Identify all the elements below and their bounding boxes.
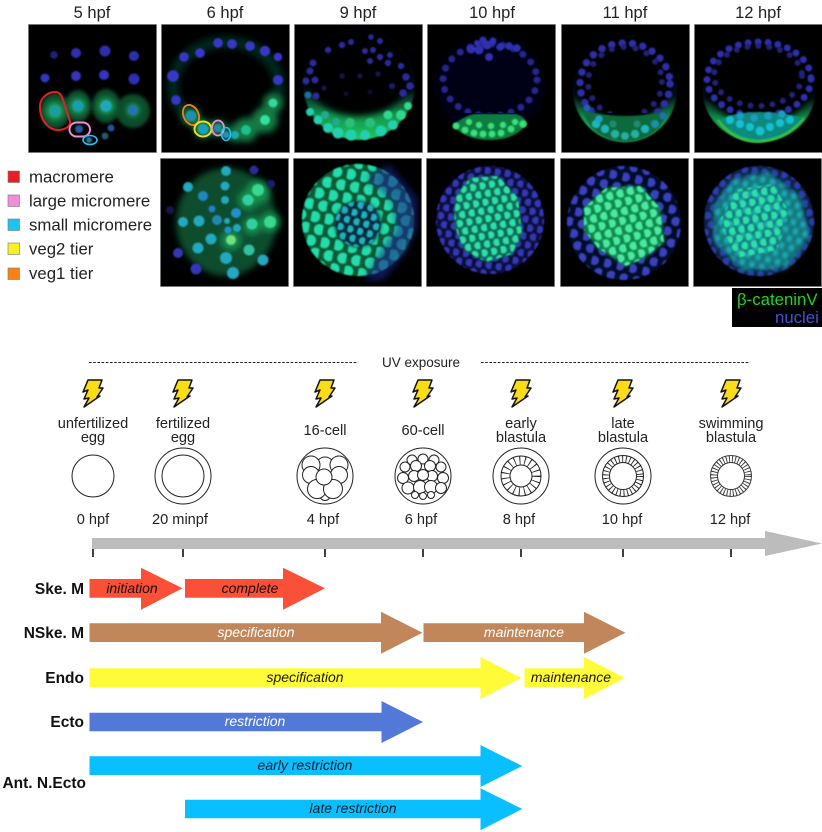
stage: late blastula: 10 hpf: [602, 512, 643, 528]
stage: 60-cell: 60-cell: [402, 423, 444, 439]
stain key: beta-cateninV and nuclei: nuclei: [775, 308, 819, 327]
stage: early blastula: [493, 416, 549, 528]
micrograph: 10 hpf lateral view: [427, 24, 556, 153]
arrow: Ant. N.Ecto late restriction: [185, 788, 522, 830]
legend item: veg2 tier: veg2 tier: [29, 240, 94, 258]
outline: small micromere: [222, 128, 230, 140]
micrograph: 5 hpf lateral view: [28, 24, 157, 153]
stage: unfertilized egg: [58, 416, 128, 528]
arrow: NSke. M maintenance: [424, 612, 626, 654]
micrograph: 11 hpf vegetal view: [560, 158, 689, 287]
arrow: Endo maintenance: [524, 657, 625, 699]
micrograph: 12 hpf vegetal view: [693, 158, 822, 287]
stage: swimming blastula: 12 hpf: [710, 512, 751, 528]
arrow: Ant. N.Ecto late restriction: late restriction: [309, 800, 397, 816]
outline: large micromere: [70, 122, 90, 136]
row label: Ecto: Ecto: [50, 714, 84, 731]
arrow: Ske. M initiation: initiation: [106, 580, 158, 596]
micrograph: 6 hpf vegetal view: [160, 158, 289, 287]
micrograph: 10 hpf vegetal view: [426, 158, 555, 287]
legend item: large micromere: large micromere: [29, 192, 150, 210]
arrow: Ant. N.Ecto early restriction: [90, 745, 522, 787]
stage: fertilized egg: egg: [171, 430, 195, 446]
stage: unfertilized egg: egg: [81, 430, 105, 446]
stain key: beta-cateninV and nuclei: [732, 288, 822, 327]
icon: UV bolt at 4 hpf: [315, 380, 335, 407]
icon: UV bolt at 6 hpf: [413, 380, 433, 407]
icon: UV bolt at 20 minpf: [173, 380, 193, 407]
arrow: Ske. M initiation: [90, 568, 182, 610]
outline: small micromere: [83, 136, 97, 144]
micrograph: 6 hpf lateral view: [161, 24, 290, 153]
stage: 60-cell: [395, 423, 451, 528]
outline: veg1 tier: [182, 104, 200, 126]
stage: early blastula: early: [505, 416, 538, 432]
arrow: NSke. M specification: [90, 612, 422, 654]
icon: UV bolt at 0 hpf: [83, 380, 103, 407]
stage: 16-cell: 4 hpf: [307, 512, 340, 528]
arrow: Ske. M complete: [185, 568, 325, 610]
legend item: small micromere: small micromere: [29, 216, 152, 234]
arrow: NSke. M specification: specification: [217, 624, 295, 640]
stage: early blastula: blastula: [496, 430, 547, 446]
stage: swimming blastula: blastula: [706, 430, 757, 446]
arrow: Ecto restriction: [90, 701, 423, 743]
column heading: 12 hpf: 12 hpf: [735, 4, 781, 22]
row label: Ske. M: Ske. M: [35, 581, 84, 598]
legend item: veg1 tier: veg1 tier: [29, 264, 94, 283]
timeline arrow with ticks: [92, 531, 822, 557]
UV exposure heading with dashed span: UV exposure: [382, 355, 460, 370]
outline: macromere: [40, 92, 70, 130]
column heading: 11 hpf: 11 hpf: [603, 4, 648, 22]
arrow: Ant. N.Ecto early restriction: early restriction: [258, 757, 353, 773]
stage: late blastula: [595, 416, 651, 528]
outline: veg2 tier: [194, 122, 212, 136]
icon: UV bolt at 12 hpf: [721, 380, 741, 407]
column heading: 5 hpf: 5 hpf: [74, 4, 111, 22]
arrow: NSke. M maintenance: maintenance: [484, 624, 564, 640]
stage: fertilized egg: [152, 416, 211, 528]
stage: late blastula: late: [611, 416, 635, 432]
row label: Endo: Endo: [45, 670, 84, 687]
stain key: beta-cateninV and nuclei: β-cateninV: [737, 290, 818, 309]
micrograph: 9 hpf vegetal view: [293, 158, 422, 287]
stage: fertilized egg: 20 minpf: [152, 512, 209, 528]
stage: fertilized egg: fertilized: [156, 416, 210, 432]
stage: 16-cell: 16-cell: [304, 423, 346, 439]
column heading: 6 hpf: 6 hpf: [207, 4, 244, 22]
micrograph: 12 hpf lateral view: [694, 24, 822, 153]
micrograph: 11 hpf lateral view: [561, 24, 690, 153]
icon: UV bolt at 8 hpf: [511, 380, 531, 407]
arrow: Endo maintenance: maintenance: [531, 669, 611, 685]
stage: 16-cell: [297, 423, 353, 528]
legend: cell types: [8, 168, 152, 283]
micrograph: 9 hpf lateral view: [294, 24, 423, 153]
outline: large micromere: [212, 120, 224, 136]
arrow: Endo specification: [90, 657, 522, 699]
stage: 60-cell: 6 hpf: [405, 512, 438, 528]
row label: Ant. N.Ecto: Ant. N.Ecto: [2, 775, 86, 792]
arrow: Endo specification: specification: [266, 669, 344, 685]
stage: swimming blastula: [699, 416, 763, 528]
stage: late blastula: blastula: [598, 430, 649, 446]
stage: unfertilized egg: 0 hpf: [77, 512, 110, 528]
column heading: 9 hpf: 9 hpf: [340, 4, 377, 22]
row label: NSke. M: NSke. M: [24, 625, 84, 642]
stage: early blastula: 8 hpf: [503, 512, 536, 528]
legend item: macromere: macromere: [29, 168, 114, 186]
stage: swimming blastula: swimming: [699, 416, 763, 432]
stage: unfertilized egg: unfertilized: [58, 416, 128, 432]
arrow: Ske. M complete: complete: [222, 580, 279, 596]
arrow: Ecto restriction: restriction: [225, 713, 286, 729]
icon: UV bolt at 10 hpf: [613, 380, 633, 407]
column heading: 10 hpf: 10 hpf: [469, 4, 515, 22]
